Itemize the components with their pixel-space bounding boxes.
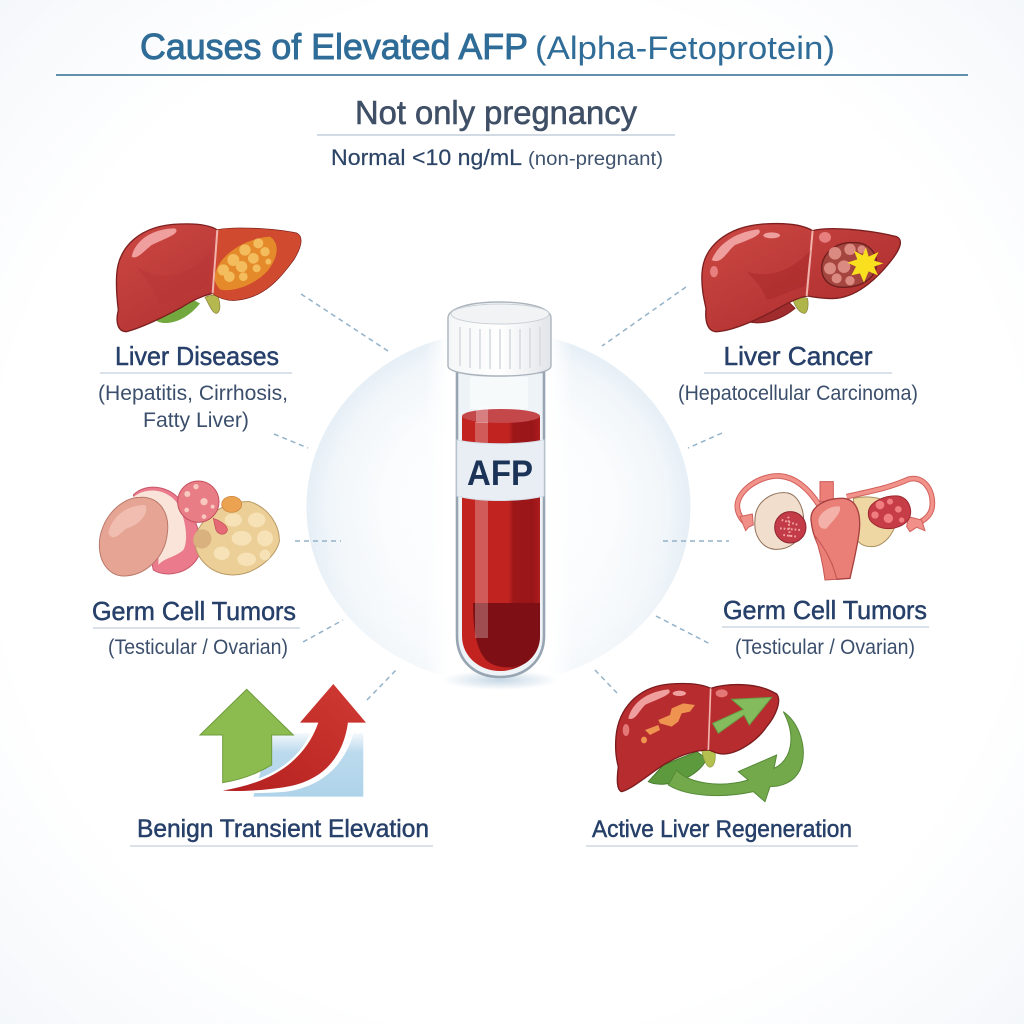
icon: ovarian tumor <box>737 476 932 580</box>
icon: test tube: AFP <box>467 454 533 493</box>
icon: liver with tumor <box>702 224 900 332</box>
description: (Testicular / Ovarian) <box>735 636 915 659</box>
icon: regenerating liver <box>616 684 803 802</box>
description: (Hepatitis, Cirrhosis, <box>98 382 288 405</box>
icon: test tube <box>442 302 558 690</box>
subtitle: not only pregnancy: Not only pregnancy <box>355 94 637 131</box>
icon: rising arrows <box>200 684 367 797</box>
normal range note: (non-pregnant) <box>528 149 663 170</box>
blood surface <box>462 409 540 423</box>
normal range note: Normal <10 ng/mL <box>331 145 522 170</box>
panel: liver diseases <box>98 224 301 432</box>
panel: germ cell tumors, testicular <box>92 481 300 659</box>
heading: Liver Diseases <box>115 341 279 371</box>
label <box>457 440 544 500</box>
title: Causes of Elevated AFP <box>140 26 528 67</box>
icon: testicular tumor <box>99 481 279 576</box>
description: (Hepatocellular Carcinoma) <box>678 382 918 405</box>
icon: fatty liver <box>116 224 301 332</box>
title <box>140 26 835 67</box>
panel: active liver regeneration <box>586 684 858 846</box>
heading: Liver Cancer <box>724 341 873 371</box>
heading: Germ Cell Tumors <box>92 596 296 626</box>
heading: Germ Cell Tumors <box>723 595 927 625</box>
title: (Alpha-Fetoprotein) <box>535 30 835 66</box>
heading: Active Liver Regeneration <box>592 816 852 843</box>
central glow circle <box>306 325 690 690</box>
panel: liver cancer <box>678 224 918 405</box>
description <box>98 382 288 432</box>
description: (Testicular / Ovarian) <box>108 636 288 659</box>
cap <box>448 302 551 376</box>
panel: benign transient elevation <box>130 684 433 846</box>
tube glass <box>457 372 544 677</box>
panel: germ cell tumors, ovarian <box>722 476 932 659</box>
connector lines <box>274 287 729 700</box>
description: Fatty Liver) <box>143 409 249 432</box>
darker lower section <box>473 603 540 667</box>
blood <box>462 416 540 671</box>
normal range note <box>331 145 663 170</box>
heading: Benign Transient Elevation <box>137 815 429 843</box>
regeneration arrow <box>668 712 803 802</box>
